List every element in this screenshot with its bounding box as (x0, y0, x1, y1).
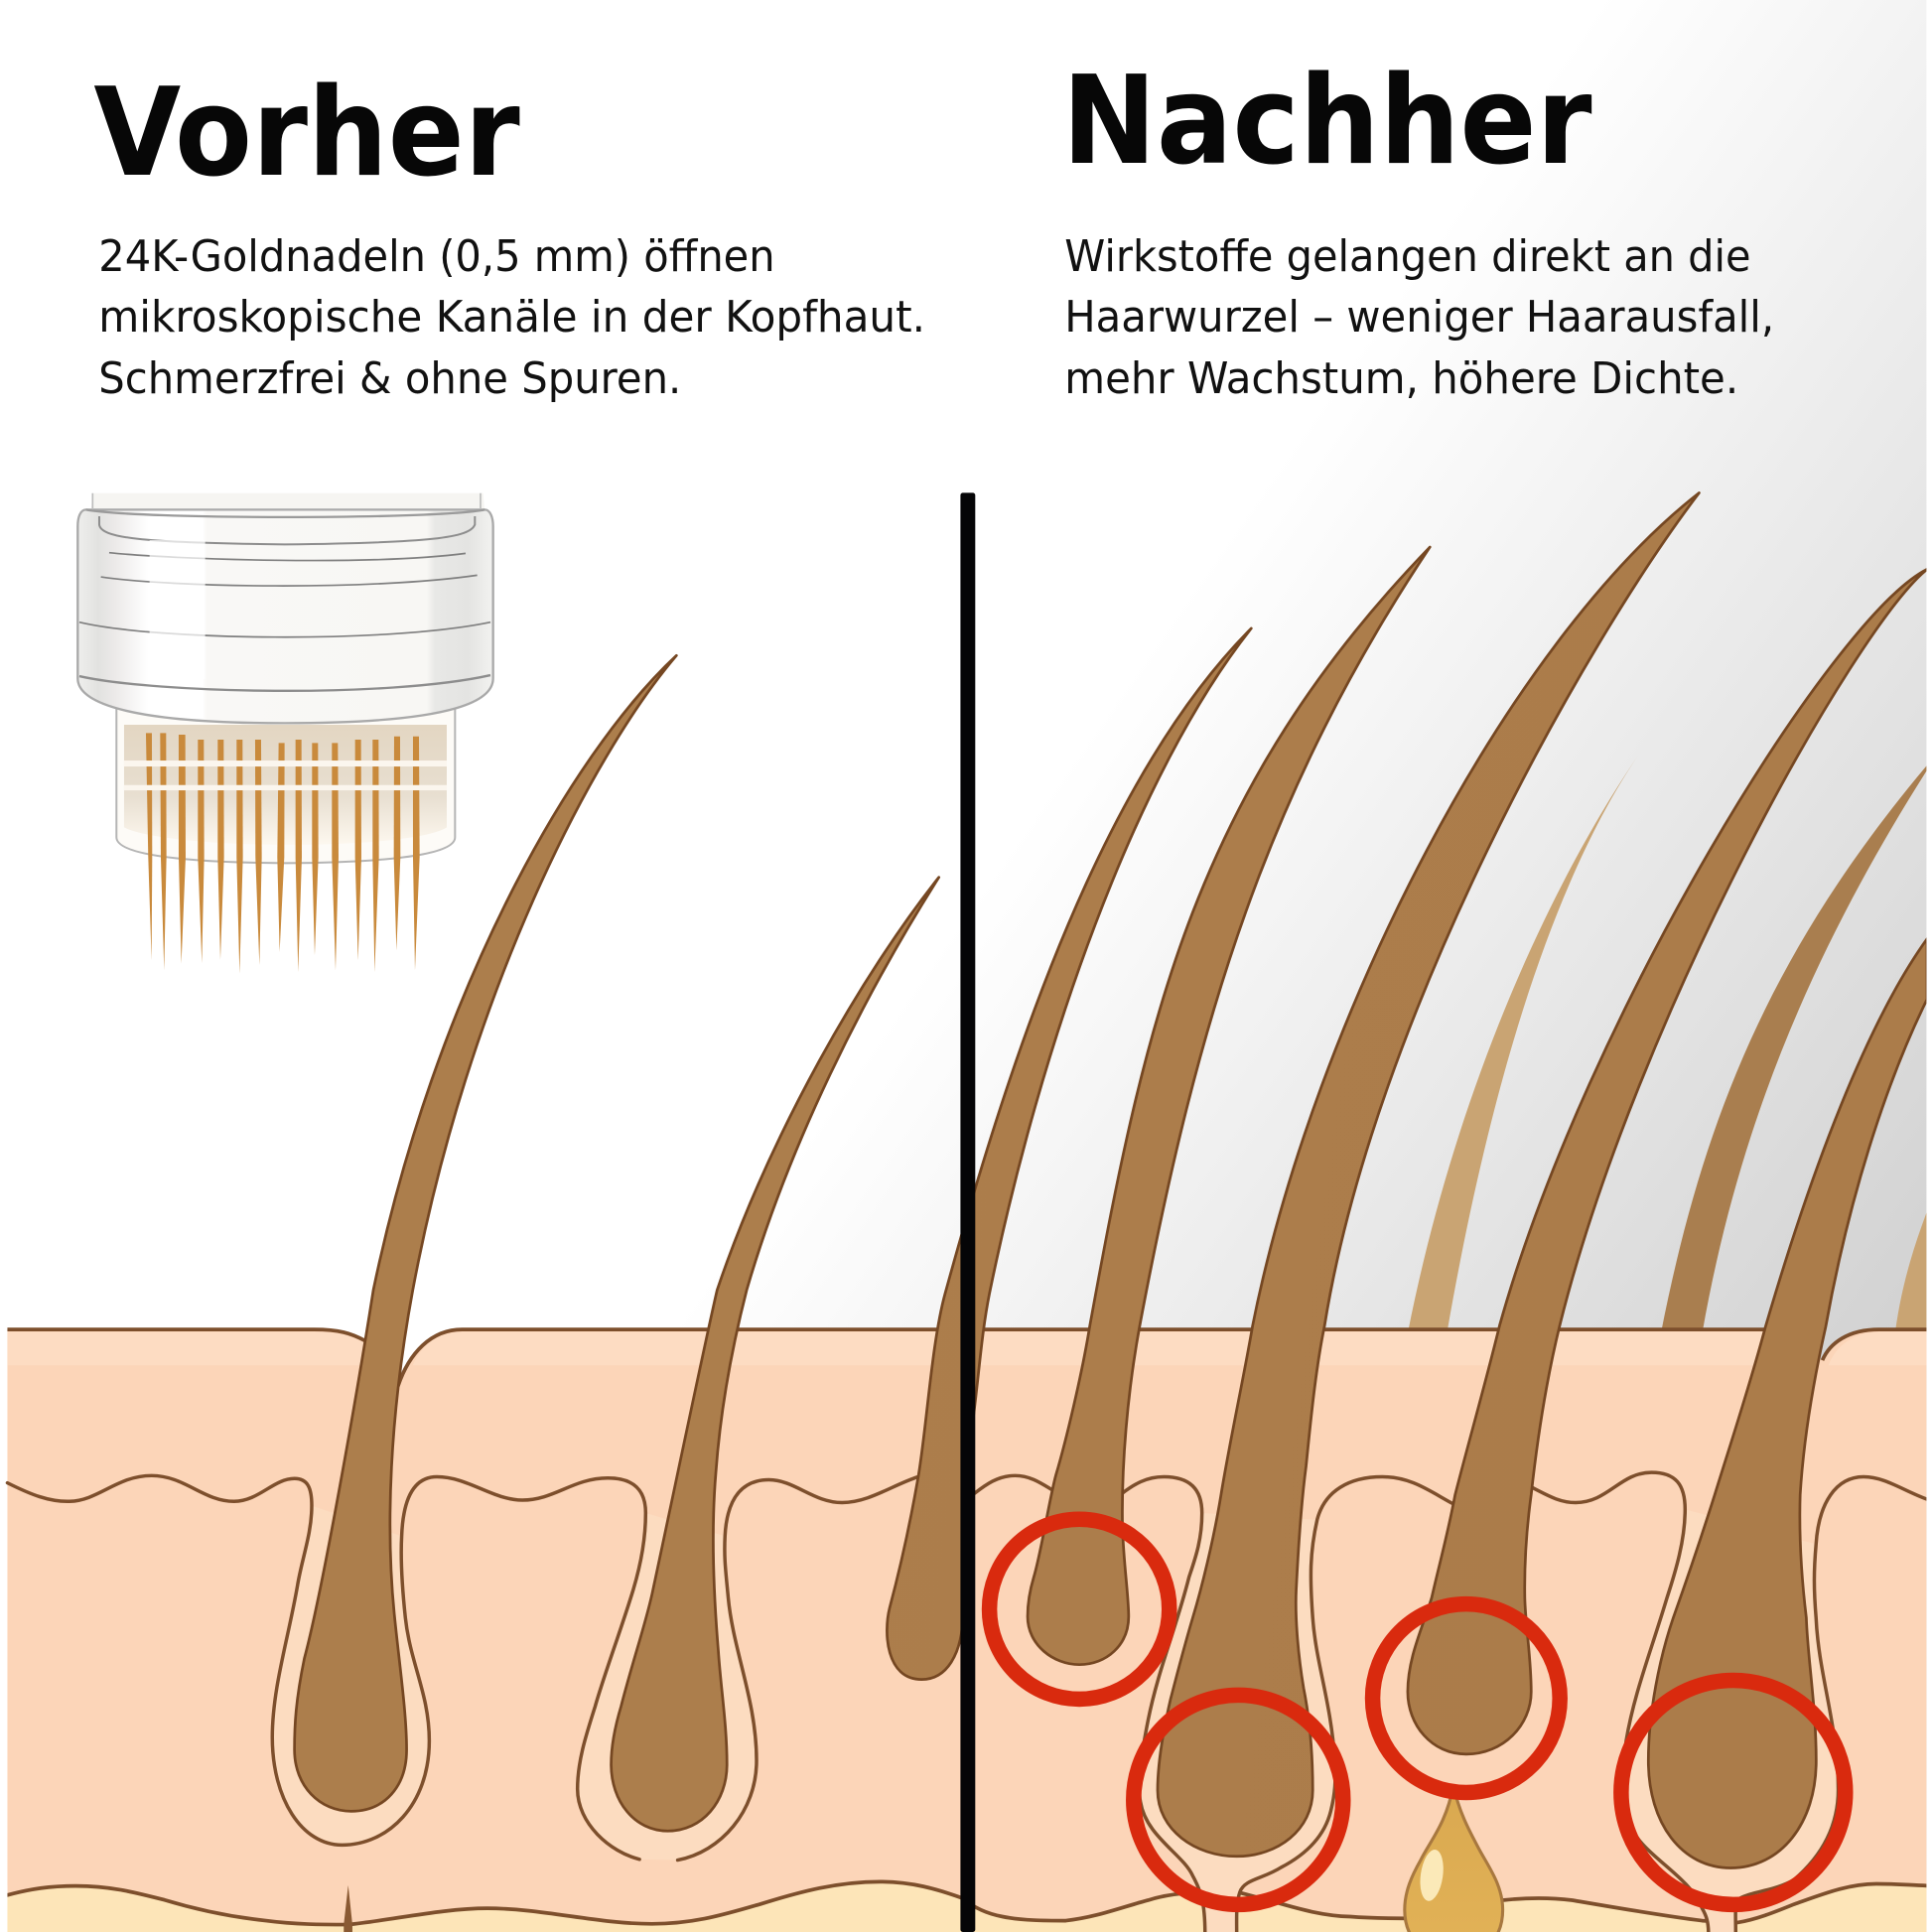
hair: Vorher 1 (295, 655, 676, 1811)
text block: Vorher description: mikroskopische Kanäle in der Kopfhaut. (98, 293, 925, 343)
hair: Nachher 2 (1158, 492, 1699, 1857)
divider line (960, 492, 975, 1932)
hair: crossing divider (887, 628, 1251, 1680)
white cross bands in head (124, 760, 447, 790)
hair: Nachher 3 (1408, 569, 1927, 1754)
hair: Vorher 2 (612, 878, 939, 1831)
text block: Vorher description: 24K-Goldnadeln (0,5 mm) öffnen (98, 232, 775, 282)
hair: Nachher 4 (1648, 939, 1927, 1867)
hair: Nachher 1 (1028, 547, 1430, 1665)
thin background hairs (1408, 752, 1927, 1333)
dermis outline waves (7, 1472, 1927, 1932)
gold needles (146, 733, 420, 974)
red highlight circles (990, 1519, 1846, 1904)
text block: Nachher description: mehr Wachstum, höhere Dichte. (1064, 354, 1738, 404)
device lower transparent head (116, 705, 455, 863)
skin highlight band (7, 1332, 1927, 1365)
text block: Vorher description: Schmerzfrei & ohne Spuren. (98, 354, 681, 404)
icon: serum drop (1405, 1785, 1503, 1932)
text block: Nachher description: Wirkstoffe gelangen direkt an die (1064, 232, 1751, 282)
skin layer (7, 1329, 1927, 1932)
heading: Vorher: Vorher (93, 62, 520, 204)
device main body (77, 493, 493, 723)
illustration: scalp cross-section with hairs (0, 492, 1930, 1932)
fat layer left edge cover (3, 1892, 8, 1932)
text block: Nachher description (1064, 232, 1774, 404)
text block: Vorher description (98, 232, 925, 404)
text block: Nachher description: Haarwurzel – weniger Haarausfall, (1064, 293, 1774, 343)
heading: Nachher: Nachher (1062, 50, 1592, 192)
fat layer (5, 1881, 1930, 1932)
device top cap (91, 493, 484, 513)
follicle sheaths (1202, 1890, 1733, 1932)
skin spike at follicle base (344, 1885, 352, 1932)
icon: microneedle device (77, 493, 493, 974)
skin top outline (7, 1329, 1927, 1386)
